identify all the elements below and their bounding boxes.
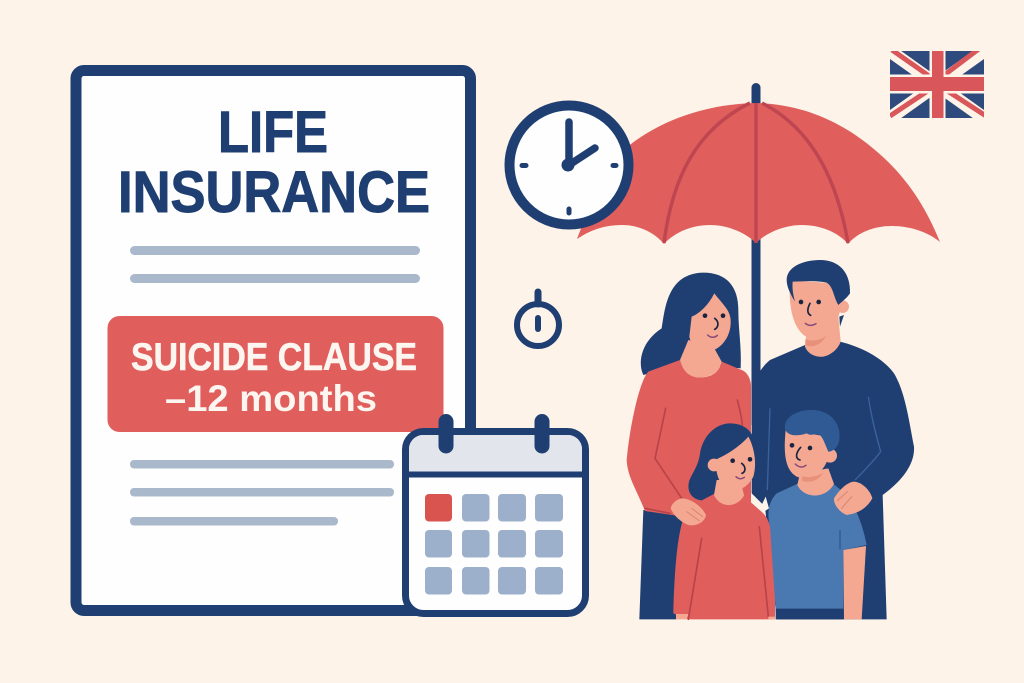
heading: life insurance: INSURANCE [118, 160, 430, 225]
icon: umbrella [577, 83, 940, 425]
boy [768, 410, 867, 619]
woman's hand [671, 498, 706, 525]
icon: clock [510, 106, 628, 224]
man's hand [834, 482, 872, 515]
text lines: upper placeholder [130, 246, 420, 283]
illustration: family [627, 260, 914, 619]
icon: stopwatch [517, 292, 559, 346]
callout: suicide clause 12 months: SUICIDE CLAUSE [131, 336, 417, 379]
panel: life insurance document [76, 70, 470, 610]
man [752, 260, 914, 619]
callout: suicide clause 12 months: –12 months [165, 378, 377, 419]
calendar day grid [425, 494, 563, 594]
highlighted day [425, 494, 452, 522]
girl [673, 423, 775, 619]
woman [627, 273, 751, 619]
text lines: lower placeholder [130, 460, 394, 526]
gap between children [762, 497, 769, 512]
icon: union jack flag [890, 48, 986, 118]
heading: life insurance: LIFE [218, 100, 328, 165]
infographic canvas [70, 51, 984, 620]
heading: life insurance [118, 100, 430, 225]
icon: calendar [405, 414, 586, 614]
callout: suicide clause 12 months [108, 316, 444, 432]
